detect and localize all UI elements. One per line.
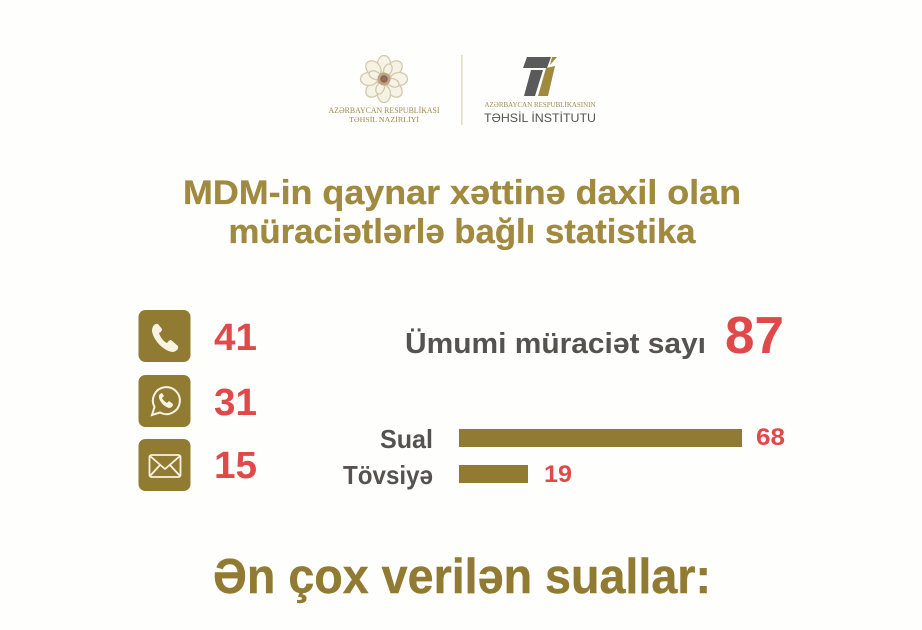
count: email: 15 xyxy=(214,445,257,487)
bar: Sual: Sual xyxy=(380,424,433,454)
channel: email xyxy=(138,439,257,491)
bar chart xyxy=(343,424,785,490)
logo: Ministry of Education xyxy=(328,56,440,124)
bar: Tövsiyə: 19 xyxy=(544,461,572,488)
institute name: AZƏRBAYCAN RESPUBLİKASININ xyxy=(484,100,596,109)
count: phone: 41 xyxy=(214,317,257,359)
logo: Education Institute xyxy=(484,57,596,125)
logo divider xyxy=(461,55,463,125)
total value: 87 xyxy=(725,307,784,365)
total requests xyxy=(405,307,784,365)
total label: Ümumi müraciət sayı xyxy=(405,327,706,360)
icon: whatsapp xyxy=(138,375,190,427)
bar: Tövsiyə: Tövsiyə xyxy=(343,460,433,490)
bar: Sual xyxy=(380,424,785,454)
title: MDM-in qaynar xəttinə daxil olan xyxy=(183,174,741,212)
logo: Ministry of Education: TƏHSİL NAZİRLİYİ xyxy=(349,115,419,124)
icon: TI mark xyxy=(523,57,557,96)
title xyxy=(183,174,741,251)
section heading: Ən çox verilən suallar: xyxy=(213,550,711,604)
logo: Education Institute: TƏHSİL İNSTİTUTU xyxy=(484,111,596,125)
icon: ministry emblem xyxy=(360,56,408,102)
ministry name: AZƏRBAYCAN RESPUBLİKASI xyxy=(328,105,440,115)
bar: Sual: 68 xyxy=(756,424,785,451)
title: müraciətlərlə bağlı statistika xyxy=(228,213,697,251)
channel: phone xyxy=(138,310,257,362)
icon: phone xyxy=(138,310,190,362)
channel: whatsapp xyxy=(138,375,257,427)
count: whatsapp: 31 xyxy=(214,382,257,424)
bar: Tövsiyə xyxy=(343,460,572,490)
icon: envelope xyxy=(138,439,190,491)
